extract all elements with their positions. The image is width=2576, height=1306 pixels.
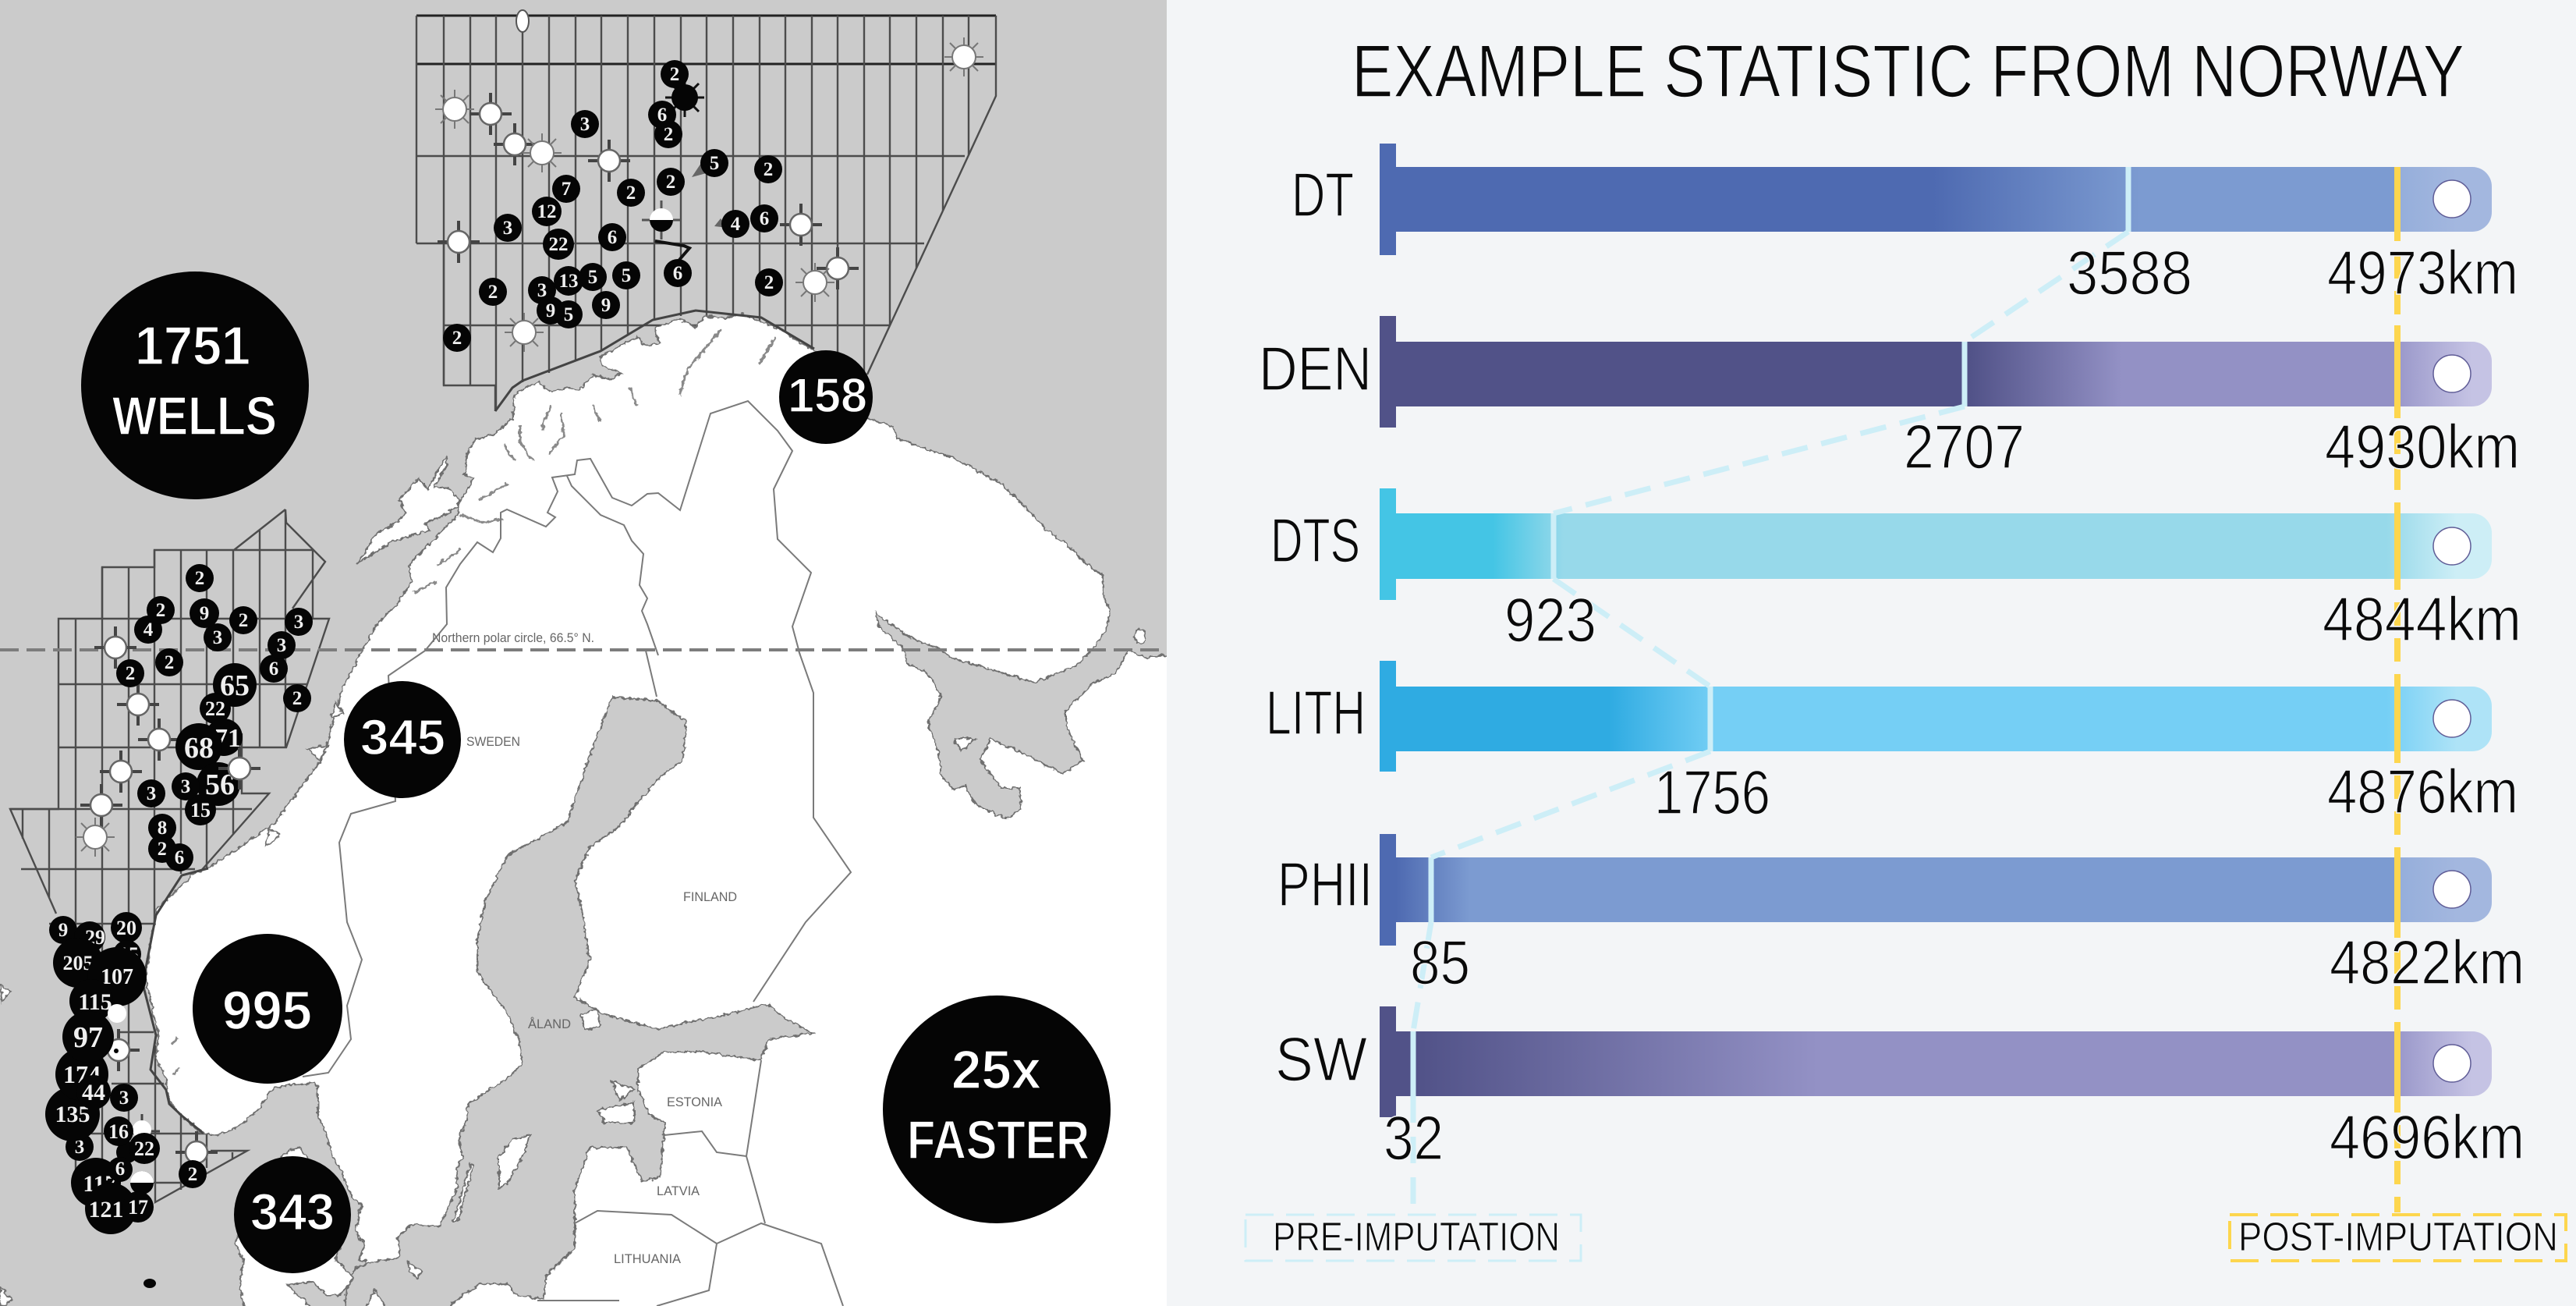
wells: southern block (North Sea): 205	[62, 952, 94, 974]
pre-imputation values: 923	[1504, 585, 1596, 655]
pre-imputation values	[1384, 238, 2192, 1173]
wells: middle block (Norwegian Sea): 65	[220, 669, 250, 702]
wells: southern block (North Sea): 3	[75, 1137, 84, 1158]
pre-imputation values: 1756	[1654, 758, 1770, 827]
row labels: DEN	[1259, 334, 1372, 403]
wells: northern block (Barents Sea): 6	[673, 263, 682, 284]
land: Scandinavia, Finland and Baltic coast	[0, 314, 1193, 1306]
wells: middle block (Norwegian Sea): 6	[175, 847, 184, 868]
post-imputation values: 4822km	[2330, 928, 2525, 997]
map place names: Northern polar circle, 66.5° N.	[432, 630, 594, 645]
wells: northern block (Barents Sea): 5	[622, 265, 631, 286]
map place names: ÅLAND	[528, 1017, 571, 1031]
map place names: SWEDEN	[466, 734, 520, 749]
wells: northern block (Barents Sea): 5	[710, 153, 719, 174]
callout: 158	[779, 350, 873, 444]
polar circle dashed line	[0, 648, 1168, 651]
row labels	[1259, 160, 1373, 1094]
callout: 343: 343	[250, 1183, 335, 1240]
map place names: LITHUANIA	[614, 1251, 682, 1266]
callout: 1751 wells: WELLS	[112, 385, 277, 446]
post-imputation values: 4696km	[2330, 1102, 2525, 1172]
callout: 343	[234, 1156, 351, 1273]
pre-imputation values: 2707	[1904, 412, 2025, 481]
wells: northern block (Barents Sea): 2	[452, 328, 462, 349]
wells: southern block (North Sea): 20	[116, 917, 136, 939]
wells: middle block (Norwegian Sea): 8	[158, 818, 167, 839]
callout: 25x faster: FASTER	[907, 1109, 1090, 1170]
callout: 25x faster	[883, 995, 1111, 1223]
wells: northern block (Barents Sea): 9	[601, 295, 611, 316]
wells: southern block (North Sea): 121	[89, 1197, 123, 1223]
wells: northern block (Barents Sea): 4	[731, 214, 741, 235]
wells: middle block (Norwegian Sea): 22	[205, 697, 225, 720]
offshore licence block grid	[10, 16, 996, 1202]
wells: southern block (North Sea): 29	[85, 926, 105, 949]
wells: middle block (Norwegian Sea): 2	[156, 600, 165, 621]
callout: 25x faster: 25x	[951, 1039, 1041, 1100]
map place names	[432, 630, 737, 1266]
wells: southern block (North Sea): 15	[119, 943, 139, 966]
pre-imputation values: 85	[1410, 928, 1470, 997]
wells: southern block (North Sea): 135	[55, 1102, 90, 1127]
row labels: DT	[1292, 160, 1354, 229]
wells: southern block (North Sea): 107	[101, 965, 133, 989]
post-imputation values: 4844km	[2323, 584, 2521, 654]
wells: southern block (North Sea): 117	[83, 1171, 117, 1197]
national borders	[303, 401, 851, 1306]
wells: middle block (Norwegian Sea): 15	[190, 799, 211, 822]
wells: middle block (Norwegian Sea): 4	[144, 619, 154, 641]
wells: northern block (Barents Sea): 3	[537, 280, 547, 301]
fjords	[172, 330, 775, 1075]
callout: 995: 995	[222, 980, 312, 1041]
post-imputation line	[2394, 167, 2401, 1212]
post-imputation values	[2323, 238, 2525, 1172]
wells: northern block (Barents Sea): 6	[760, 208, 769, 229]
wells: northern block (Barents Sea): 13	[558, 271, 579, 292]
wells: northern block (Barents Sea): 5	[564, 304, 573, 325]
bar: DEN	[1380, 316, 2492, 428]
wells: northern block (Barents Sea): 2	[666, 172, 675, 193]
pre-imputation connector	[1413, 167, 2128, 1205]
callout: 345: 345	[360, 709, 445, 765]
wells: northern block (Barents Sea): 7	[562, 179, 571, 200]
wells: middle block (Norwegian Sea): 9	[200, 603, 209, 624]
wells: middle block (Norwegian Sea): 68	[184, 732, 214, 765]
wells: middle block (Norwegian Sea): 3	[294, 612, 303, 633]
wells: southern block (North Sea)	[45, 912, 218, 1288]
wells: middle block (Norwegian Sea): 6	[269, 658, 278, 680]
coastline boundary line	[143, 311, 814, 1133]
Baltic islands	[236, 739, 975, 1306]
wells: northern block (Barents Sea): 6	[608, 227, 617, 248]
wells: northern block (Barents Sea): 2	[664, 124, 673, 145]
row labels: LITH	[1266, 678, 1366, 747]
wells: northern block (Barents Sea): 22	[549, 234, 568, 255]
post-imputation values: 4973km	[2327, 238, 2518, 307]
wells: middle block (Norwegian Sea): 2	[292, 688, 302, 709]
wells: middle block (Norwegian Sea): 56	[205, 768, 235, 801]
bar: DT	[1380, 144, 2492, 255]
callout: 158: 158	[788, 369, 867, 423]
wells: southern block (North Sea): 16	[108, 1120, 129, 1143]
bar: LITH	[1380, 661, 2492, 772]
pre-imputation values: 32	[1384, 1103, 1444, 1173]
post-imputation values: 4876km	[2327, 757, 2518, 826]
wells: middle block (Norwegian Sea): 3	[147, 783, 156, 804]
wells: northern block (Barents Sea): 2	[764, 159, 773, 180]
wells: middle block (Norwegian Sea): 2	[158, 839, 167, 860]
wells: middle block (Norwegian Sea): 2	[239, 610, 248, 631]
island: Lofoten	[357, 455, 459, 564]
callout: 1751 wells	[81, 271, 309, 499]
wells: northern block (Barents Sea): 3	[503, 218, 512, 239]
callout: 995	[193, 934, 342, 1084]
row labels: PHII	[1277, 850, 1373, 919]
wells: northern block (Barents Sea): 2	[764, 272, 774, 293]
wells: northern block (Barents Sea)	[435, 10, 983, 352]
wells: middle block (Norwegian Sea)	[76, 564, 313, 871]
wells: middle block (Norwegian Sea): 3	[213, 627, 222, 648]
wells: northern block (Barents Sea): 12	[537, 201, 557, 222]
panel: map of Norway well locations	[0, 0, 1193, 1306]
wells: northern block (Barents Sea): 3	[580, 114, 590, 135]
wells: southern block (North Sea): 115	[78, 989, 112, 1015]
wells: middle block (Norwegian Sea): 3	[181, 776, 190, 797]
wells: southern block (North Sea): 97	[73, 1021, 103, 1054]
row labels: DTS	[1270, 506, 1360, 575]
callout: 345	[344, 681, 461, 798]
bar: SW	[1380, 1006, 2492, 1117]
wells: northern block (Barents Sea): 2	[626, 183, 636, 204]
seas: Gulf of Bothnia and Baltic	[343, 697, 813, 1306]
wells: southern block (North Sea): 17	[128, 1196, 148, 1219]
map place names: FINLAND	[683, 889, 737, 904]
bar: PHII	[1380, 834, 2492, 946]
wells: southern block (North Sea): 44	[82, 1080, 105, 1105]
wells: middle block (Norwegian Sea): 2	[126, 663, 135, 684]
bar: DTS	[1380, 488, 2492, 600]
wells: northern block (Barents Sea): 5	[588, 267, 597, 288]
wells: southern block (North Sea): 174	[63, 1060, 101, 1088]
pre-imputation values: 3588	[2067, 238, 2192, 307]
wells: northern block (Barents Sea): 6	[657, 105, 667, 126]
wells: middle block (Norwegian Sea): 2	[165, 652, 174, 673]
wells: middle block (Norwegian Sea): 2	[195, 568, 204, 589]
coastal skerries and islands	[0, 702, 343, 1306]
post-imputation values: 4930km	[2325, 412, 2520, 481]
legend: pre-imputation: PRE-IMPUTATION	[1273, 1215, 1560, 1260]
wells: southern block (North Sea): 6	[115, 1159, 125, 1180]
map place names: LATVIA	[657, 1184, 700, 1198]
wells: southern block (North Sea): 2	[188, 1164, 197, 1185]
row labels: SW	[1275, 1024, 1367, 1094]
wells: middle block (Norwegian Sea): 3	[277, 635, 286, 656]
wells: northern block (Barents Sea): 2	[670, 64, 679, 85]
wells: northern block (Barents Sea): 9	[546, 300, 555, 321]
callout: 1751 wells: 1751	[135, 315, 250, 376]
panel: Norway statistics	[1167, 0, 2576, 1306]
wells: southern block (North Sea): 3	[119, 1088, 129, 1109]
map place names: ESTONIA	[667, 1095, 723, 1109]
wells: southern block (North Sea): 9	[58, 920, 68, 941]
wells: northern block (Barents Sea): 2	[488, 282, 498, 303]
wells: middle block (Norwegian Sea): 71	[214, 724, 241, 753]
wells: southern block (North Sea): 22	[134, 1137, 154, 1160]
